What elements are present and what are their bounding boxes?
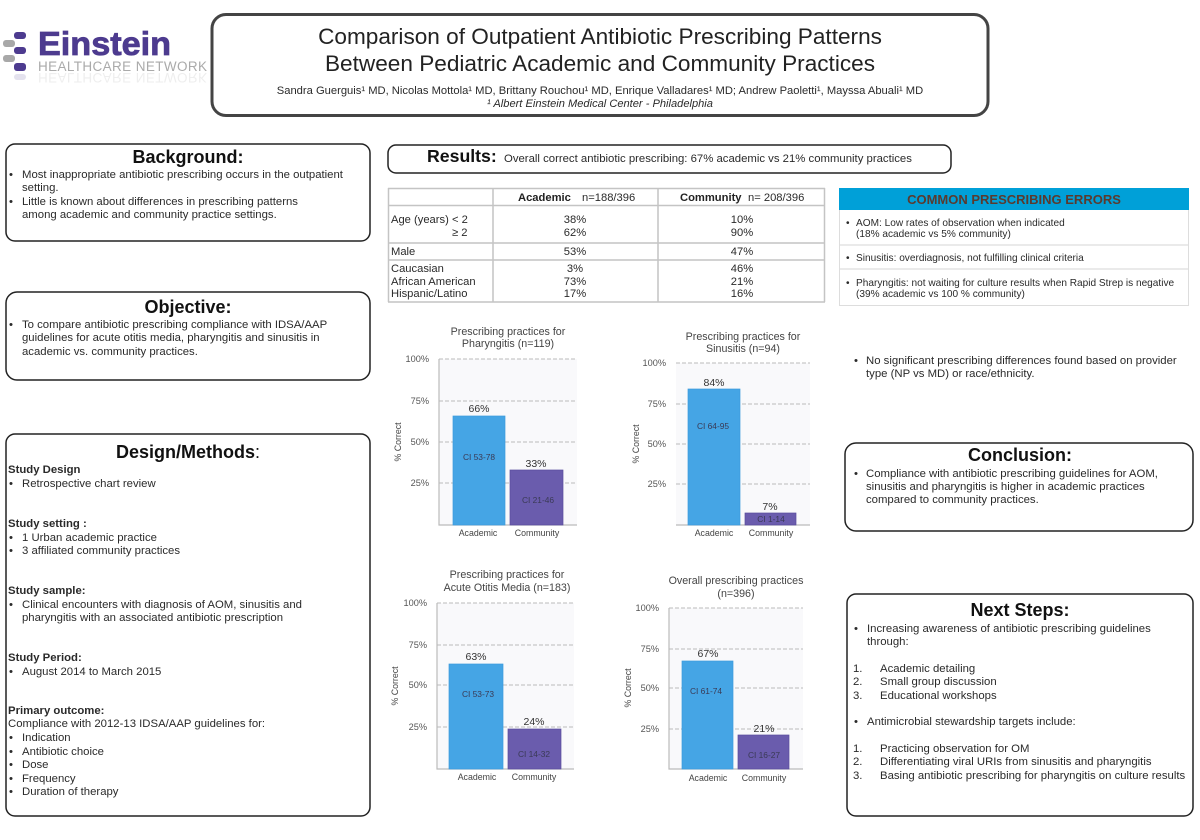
study period: August 2014 to March 2015 [22, 666, 161, 678]
bar chart: acute otitis media: Prescribing practices for [450, 569, 565, 581]
study design: Retrospective chart review [22, 478, 156, 490]
bar: community 24% [508, 716, 561, 769]
bar: academic 67% [682, 648, 733, 769]
bar chart: acute otitis media [390, 569, 574, 782]
note: no significant differences [854, 355, 1177, 380]
bar: community 7%: CI 1-14 [757, 514, 785, 524]
table row: age: 90% [731, 227, 753, 239]
note: no significant differences: • [854, 355, 858, 367]
bar chart: acute otitis media: 100% [404, 598, 427, 608]
bar chart: sinusitis: Sinusitis (n=94) [706, 343, 780, 355]
bar chart: overall: (n=396) [717, 588, 755, 600]
authors: Sandra Guerguis¹ MD, Nicolas Mottola¹ MD, Brittany Rouchou¹ MD, Enrique Valladares¹ MD; Andrew Paoletti¹, Mayssa Abuali¹ MD [277, 85, 923, 97]
logo: Einstein Healthcare Network: HEALTHCARE NETWORK [38, 70, 207, 85]
bar: academic 66%: 66% [468, 403, 490, 415]
bar chart: pharyngitis: Pharyngitis (n=119) [462, 338, 554, 350]
stewardship list: • [854, 716, 858, 728]
heading: design and methods: Design/Methods: [116, 442, 260, 462]
bar chart: sinusitis: 100% [642, 358, 666, 368]
error: pharyngitis: Pharyngitis: not waiting for culture results when Rapid Strep is negative [856, 278, 1175, 289]
study setting [8, 518, 180, 557]
table header: Academic [518, 192, 571, 204]
bar: academic 63%: CI 53-73 [462, 689, 494, 699]
bar: academic 67%: 67% [697, 648, 719, 660]
primary outcome: Compliance with 2012-13 IDSA/AAP guidelines for: [8, 718, 265, 730]
primary outcome: • [9, 746, 13, 758]
errors heading [839, 188, 1189, 210]
stewardship list: Differentiating viral URIs from sinusitis and pharyngitis [880, 756, 1152, 768]
conclusion text: Compliance with antibiotic prescribing guidelines for AOM, [866, 468, 1158, 480]
study sample: • [9, 599, 13, 611]
error: AOM: (18% academic vs 5% community) [856, 229, 1011, 240]
study period: Study Period: [8, 652, 82, 664]
bar chart: overall: Overall prescribing practices [669, 575, 803, 587]
bar chart: pharyngitis: Community [515, 528, 560, 538]
stewardship list: Basing antibiotic prescribing for pharyngitis on culture results [880, 770, 1186, 782]
awareness list: • [854, 623, 858, 635]
table rows: race and ethnicity: 46% [731, 263, 753, 275]
table row: age [391, 214, 753, 239]
study sample: Study sample: [8, 585, 86, 597]
heading: next steps: Next Steps: [970, 600, 1070, 620]
background bullets: setting. [22, 182, 59, 194]
background bullets: among academic and community practice settings. [22, 209, 277, 221]
table rows: race and ethnicity: 21% [731, 276, 753, 288]
bar chart: sinusitis: 25% [648, 479, 666, 489]
bar: academic 66%: CI 53-78 [463, 452, 495, 462]
table row: age: 10% [731, 214, 753, 226]
table row: age: 38% [564, 214, 586, 226]
bar chart: acute otitis media: 75% [409, 640, 427, 650]
title [318, 24, 882, 76]
error: AOM [846, 218, 1065, 240]
background bullets [9, 169, 344, 221]
table row: age: < 2 [452, 214, 468, 226]
awareness list [853, 623, 1151, 702]
study setting: • [9, 545, 13, 557]
bar chart: pharyngitis: 100% [406, 354, 429, 364]
bar: community 7% [745, 501, 796, 525]
bar chart: acute otitis media: 50% [409, 680, 427, 690]
table row: male: 47% [731, 246, 753, 258]
panel: background [6, 144, 370, 241]
bar: academic 63% [449, 651, 503, 769]
table header: Community [680, 192, 742, 204]
bar chart: pharyngitis: Prescribing practices for [451, 326, 566, 338]
study design: • [9, 478, 13, 490]
study setting: Study setting : [8, 518, 87, 530]
awareness list: through: [867, 636, 909, 648]
error: pharyngitis: (39% academic vs 100 % community) [856, 289, 1025, 300]
primary outcome: Primary outcome: [8, 705, 104, 717]
note: no significant differences: type (NP vs MD) or race/ethnicity. [866, 368, 1035, 380]
bar chart: overall: % Correct [623, 668, 633, 708]
table rows: race and ethnicity: 17% [564, 288, 586, 300]
study setting: 1 Urban academic practice [22, 532, 157, 544]
table rows: race and ethnicity [391, 263, 753, 300]
bar chart: overall: Academic [689, 773, 728, 783]
table row: male: 53% [564, 246, 586, 258]
conclusion text: compared to community practices. [866, 494, 1039, 506]
title: Comparison of Outpatient Antibiotic Prescribing Patterns [318, 24, 882, 49]
error: sinusitis: • [846, 253, 850, 264]
bar chart: pharyngitis [393, 326, 577, 538]
panel: common prescribing errors [839, 188, 1189, 306]
bar: academic 66% [453, 403, 505, 525]
bar chart: sinusitis [631, 331, 810, 538]
primary outcome: • [9, 732, 13, 744]
bar: academic 84%: CI 64-95 [697, 421, 729, 431]
bar chart: acute otitis media: Community [512, 772, 557, 782]
heading: conclusion: Conclusion: [968, 445, 1072, 465]
study sample [8, 585, 302, 624]
primary outcome: • [9, 773, 13, 785]
bar chart: pharyngitis: Academic [459, 528, 498, 538]
background bullets: Most inappropriate antibiotic prescribing occurs in the outpatient [22, 169, 344, 181]
study design: Study Design [8, 464, 81, 476]
panel: results banner [388, 145, 951, 173]
study sample: pharyngitis with an associated antibiotic prescription [22, 612, 283, 624]
bar chart: pharyngitis: % Correct [393, 422, 403, 462]
panel: objective [6, 292, 370, 380]
bar: community 24%: CI 14-32 [518, 749, 550, 759]
bar chart: overall: 50% [641, 683, 659, 693]
bar chart: pharyngitis: 50% [411, 437, 429, 447]
study period [8, 652, 161, 678]
error: AOM: • [846, 218, 850, 229]
demographics table [388, 188, 825, 302]
error: AOM: AOM: Low rates of observation when indicated [856, 218, 1065, 229]
table rows: race and ethnicity: 16% [731, 288, 753, 300]
title panel [212, 14, 988, 116]
bar chart: pharyngitis: 75% [411, 396, 429, 406]
bar: community 7%: 7% [762, 501, 778, 513]
error: pharyngitis [846, 278, 1175, 300]
table rows: race and ethnicity: Hispanic/Latino [391, 288, 468, 300]
bar chart: acute otitis media: Acute Otitis Media (n=183) [444, 582, 570, 594]
bar: academic 84%: 84% [703, 377, 725, 389]
bar chart: overall [623, 575, 803, 783]
primary outcome: Indication [22, 732, 71, 744]
affiliation: ¹ Albert Einstein Medical Center - Philadelphia [487, 98, 713, 110]
objective text: academic vs. community practices. [22, 346, 198, 358]
panel: conclusion [845, 443, 1193, 531]
bar: community 33%: CI 21-46 [522, 495, 554, 505]
bar chart: pharyngitis: 25% [411, 478, 429, 488]
error: pharyngitis: • [846, 278, 850, 289]
stewardship list [853, 716, 1186, 782]
awareness list: Educational workshops [880, 690, 997, 702]
bar: academic 84% [688, 377, 740, 525]
awareness list: Small group discussion [880, 676, 997, 688]
table rows: race and ethnicity: African American [391, 276, 476, 288]
bar: community 33%: 33% [525, 458, 547, 470]
primary outcome: Dose [22, 759, 48, 771]
stewardship list: 1. [853, 743, 862, 755]
awareness list: Increasing awareness of antibiotic prescribing guidelines [867, 623, 1151, 635]
study design [8, 464, 156, 490]
bar chart: overall: 25% [641, 724, 659, 734]
note: no significant differences: No significant prescribing differences found based on provider [866, 355, 1177, 367]
results summary: Overall correct antibiotic prescribing: 67% academic vs 21% community practices [504, 153, 912, 165]
study setting: • [9, 532, 13, 544]
bar chart: sinusitis: % Correct [631, 424, 641, 464]
table row: age: ≥ 2 [452, 227, 467, 239]
objective text: • [9, 319, 13, 331]
primary outcome: Duration of therapy [22, 786, 119, 798]
bar chart: sinusitis: Prescribing practices for [686, 331, 801, 343]
awareness list: Academic detailing [880, 663, 975, 675]
heading: results: Results: [427, 146, 497, 166]
stewardship list: 3. [853, 770, 862, 782]
panel: design and methods [6, 434, 370, 816]
title: Between Pediatric Academic and Community Practices [325, 51, 875, 76]
bar chart: overall: 100% [636, 603, 659, 613]
logo: Einstein Healthcare Network: HEALTHCARE NETWORK [38, 59, 207, 74]
bar chart: sinusitis: 50% [648, 439, 666, 449]
error: sinusitis: Sinusitis: overdiagnosis, not fulfilling clinical criteria [856, 253, 1084, 264]
table row: male: Male [391, 246, 415, 258]
background bullets: • [9, 196, 13, 208]
heading: objective: Objective: [144, 297, 232, 317]
bar chart: overall: 75% [641, 644, 659, 654]
primary outcome: • [9, 786, 13, 798]
logo: Einstein Healthcare Network [3, 25, 207, 85]
bar chart: acute otitis media: Academic [458, 772, 497, 782]
bar chart: sinusitis: Community [749, 528, 794, 538]
bar: community 33% [510, 458, 563, 525]
stewardship list: Antimicrobial stewardship targets include: [867, 716, 1076, 728]
table row: age: Age (years) [391, 214, 449, 226]
table header: n=188/396 [582, 192, 635, 204]
table rows: race and ethnicity: Caucasian [391, 263, 444, 275]
primary outcome: Frequency [22, 773, 76, 785]
bar chart: acute otitis media: % Correct [390, 666, 400, 706]
objective text: guidelines for acute otitis media, pharyngitis and sinusitis in [22, 332, 320, 344]
conclusion text: sinusitis and pharyngitis is higher in academic practices [866, 481, 1145, 493]
table rows: race and ethnicity: 3% [567, 263, 583, 275]
logo: Einstein Healthcare Network: Einstein [38, 25, 171, 62]
table header [518, 192, 804, 204]
objective text [9, 319, 327, 358]
study period: • [9, 666, 13, 678]
conclusion text [854, 468, 1158, 506]
bar chart: acute otitis media: 25% [409, 722, 427, 732]
bar chart: sinusitis: 75% [648, 399, 666, 409]
primary outcome: Antibiotic choice [22, 746, 104, 758]
table row: age: 62% [564, 227, 586, 239]
awareness list: 1. [853, 663, 862, 675]
stewardship list: Practicing observation for OM [880, 743, 1029, 755]
primary outcome: • [9, 759, 13, 771]
objective text: To compare antibiotic prescribing compliance with IDSA/AAP [22, 319, 327, 331]
awareness list: 2. [853, 676, 862, 688]
study sample: Clinical encounters with diagnosis of AOM, sinusitis and [22, 599, 302, 611]
bar: academic 67%: CI 61-74 [690, 686, 722, 696]
bar: community 21% [738, 723, 789, 769]
awareness list: 3. [853, 690, 862, 702]
bar: community 24%: 24% [523, 716, 545, 728]
background bullets: Little is known about differences in prescribing patterns [22, 196, 298, 208]
conclusion text: • [854, 468, 858, 480]
bar: community 21%: 21% [753, 723, 775, 735]
table row: male [391, 246, 753, 258]
bar chart: sinusitis: Academic [695, 528, 734, 538]
errors heading: COMMON PRESCRIBING ERRORS [907, 192, 1121, 207]
bar chart: overall: Community [742, 773, 787, 783]
primary outcome [8, 705, 265, 798]
stewardship list: 2. [853, 756, 862, 768]
table rows: race and ethnicity: 73% [564, 276, 586, 288]
panel: next steps [847, 594, 1193, 816]
heading: background: Background: [132, 147, 244, 167]
bar: community 21%: CI 16-27 [748, 750, 780, 760]
table header: n= 208/396 [748, 192, 804, 204]
study setting: 3 affiliated community practices [22, 545, 180, 557]
background bullets: • [9, 169, 13, 181]
bar: academic 63%: 63% [465, 651, 487, 663]
